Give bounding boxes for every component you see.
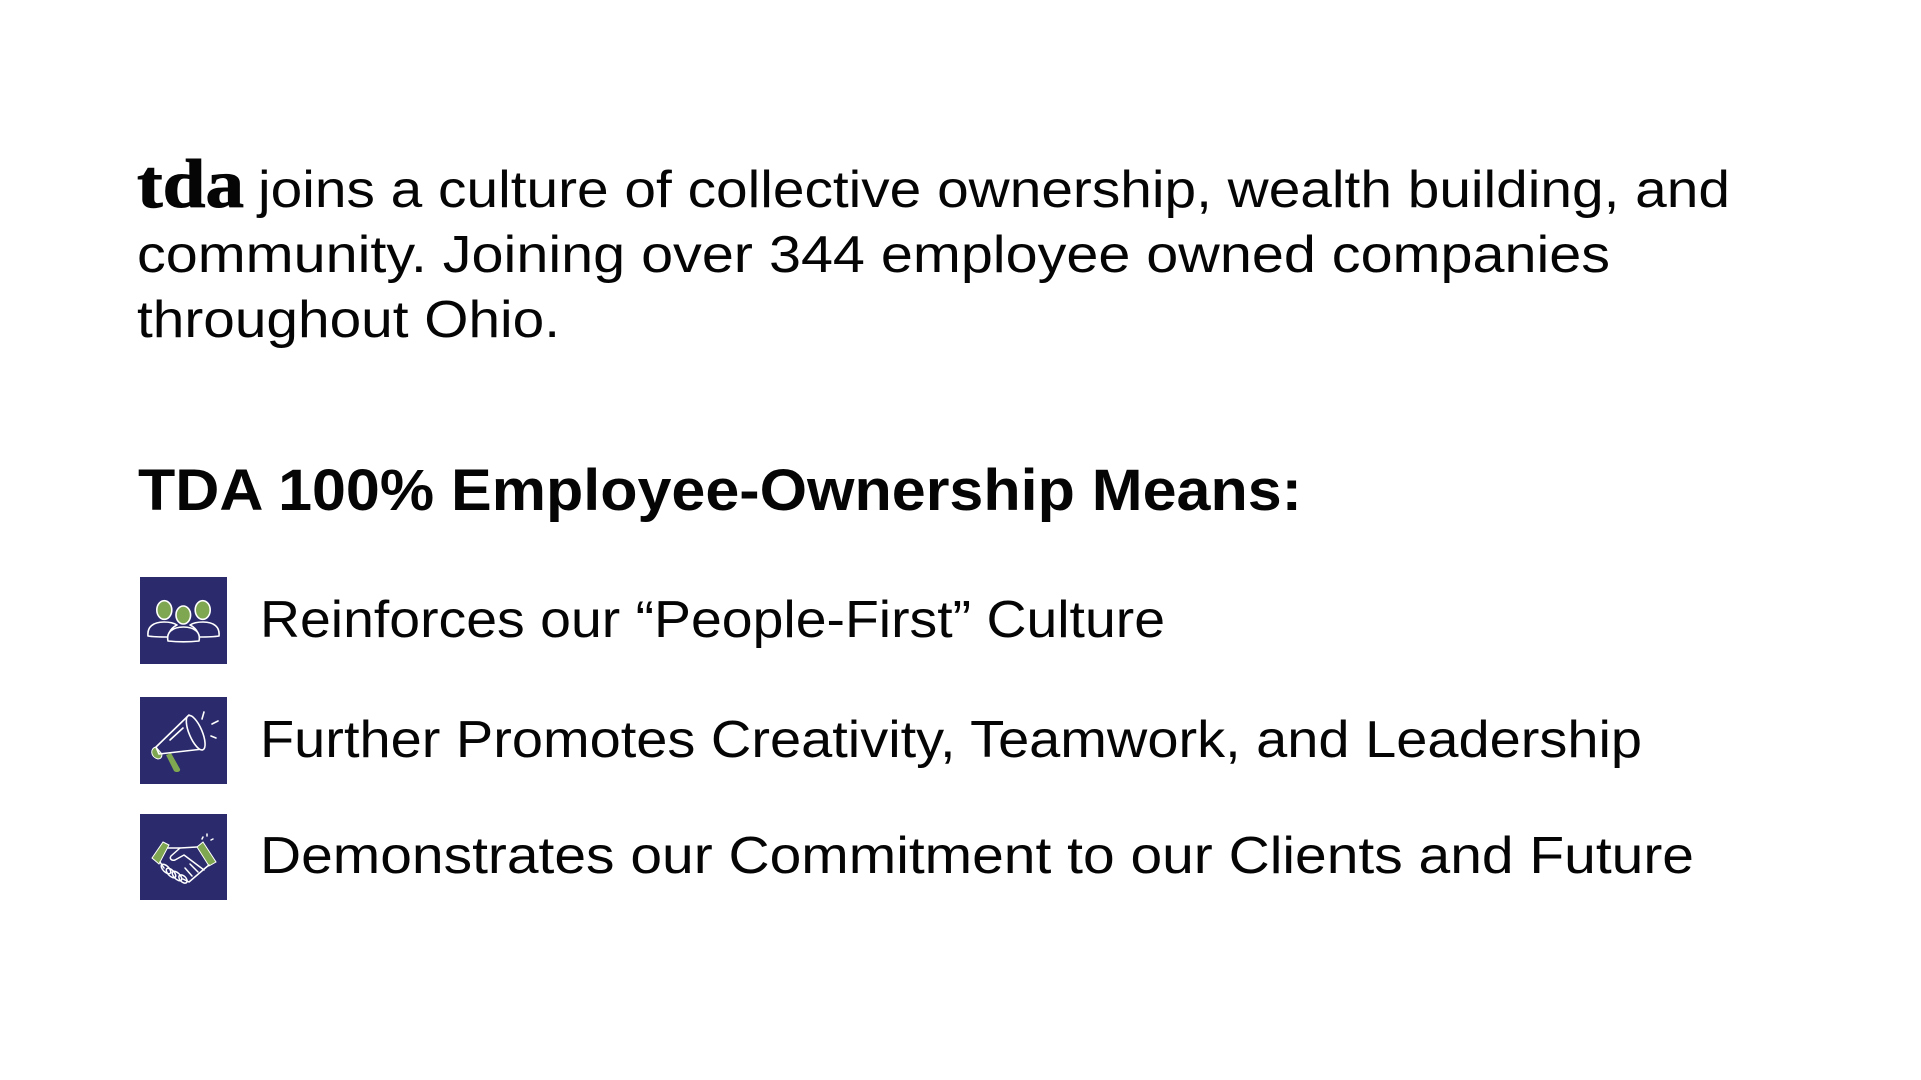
intro line 2: community. Joining over 344 employee owned companies [137, 226, 1610, 284]
icon: handshake [140, 814, 227, 900]
icon: megaphone [140, 697, 227, 784]
intro paragraph [137, 146, 1730, 349]
item text: Further Promotes Creativity, Teamwork, and Leadership [260, 711, 1642, 769]
list item: commitment [140, 814, 1694, 900]
item text: Demonstrates our Commitment to our Clients and Future [260, 827, 1694, 885]
intro line 1: joins a culture of collective ownership, wealth building, and [256, 161, 1730, 219]
item text: Reinforces our “People-First” Culture [260, 591, 1165, 649]
list item: people first [140, 577, 1165, 664]
list item: teamwork [140, 697, 1642, 784]
tda wordmark: tda [137, 146, 244, 222]
icon: people [140, 577, 227, 664]
intro line 3: throughout Ohio. [137, 291, 560, 349]
heading: TDA 100% Employee-Ownership Means: [138, 458, 1302, 523]
